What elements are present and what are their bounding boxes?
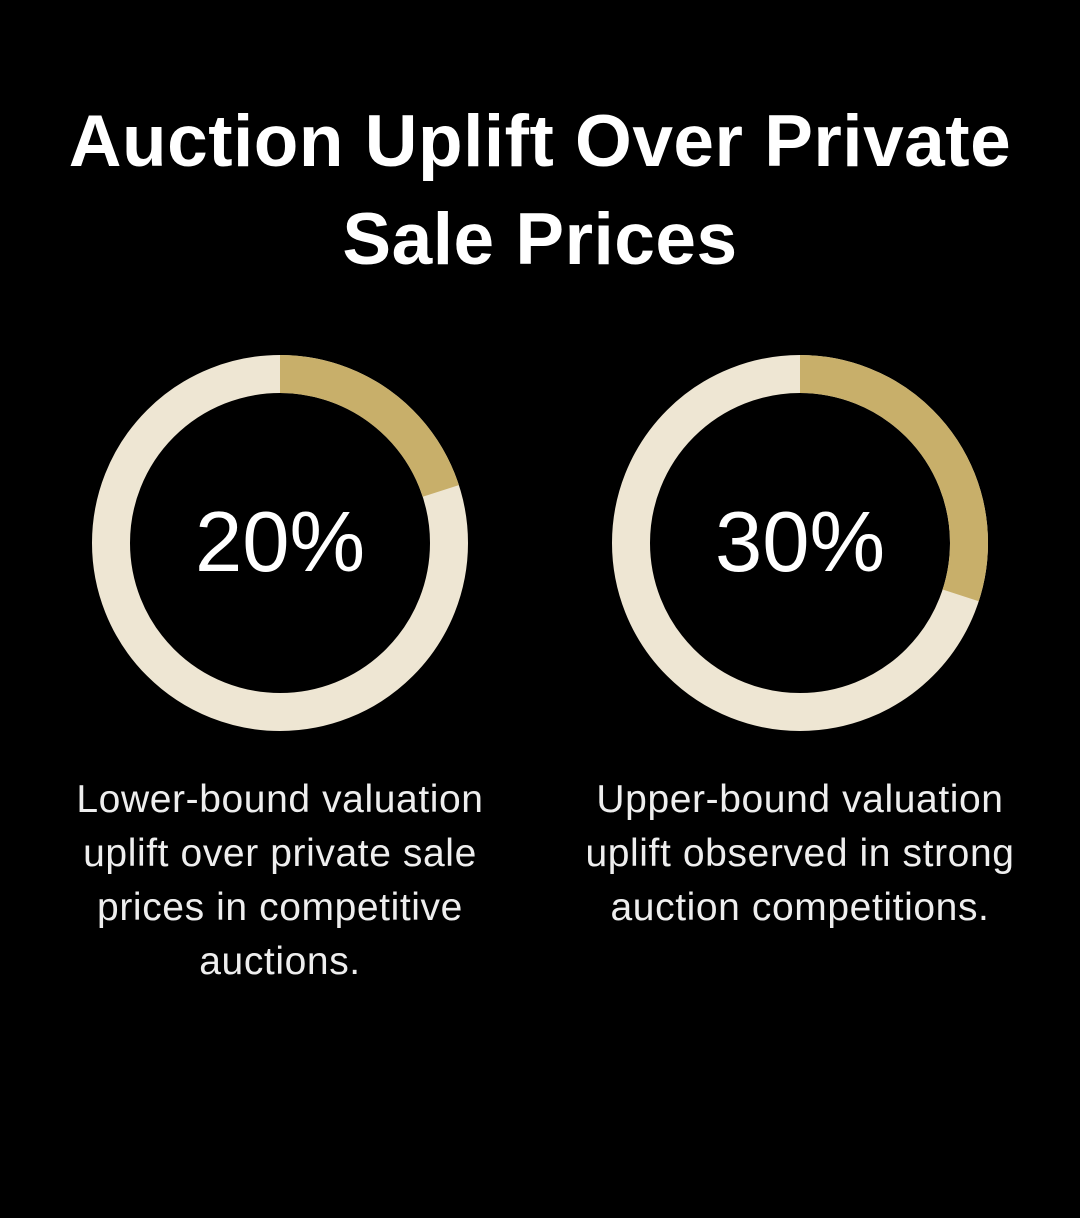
donut: 30% — [631, 374, 969, 712]
donut: 20% — [111, 374, 449, 712]
donut: 20%: 20% — [195, 495, 365, 590]
title: Sale Prices — [342, 199, 738, 280]
donut: 30%: 30% — [715, 495, 885, 590]
text: lower-bound description: Lower-bound valuation uplift over private sale prices in competitive auctions. — [76, 778, 484, 983]
title — [69, 101, 1011, 280]
title: Auction Uplift Over Private — [69, 101, 1011, 182]
text: upper-bound description: Upper-bound valuation uplift observed in strong auction competitions. — [585, 778, 1015, 929]
